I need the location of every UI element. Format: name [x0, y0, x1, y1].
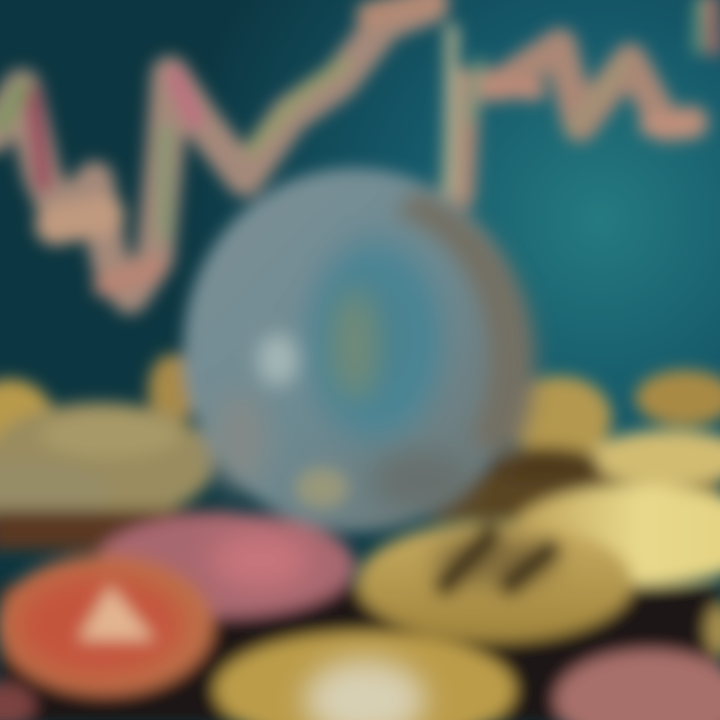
bar: bright yellow coin edge — [510, 485, 720, 585]
pile: back row of gold coins — [0, 354, 720, 550]
coin: bottom gold — [215, 632, 515, 720]
chart: blurred market line — [0, 0, 714, 295]
coin: bottom right rose — [555, 650, 720, 720]
coin: orange red — [0, 555, 213, 695]
icon: pale triangle on red coin — [78, 585, 155, 640]
dark gaps between coins — [0, 585, 720, 720]
coin: gold with dark symbol — [357, 522, 633, 642]
coin: lower left rose — [0, 683, 35, 720]
pile: front row of coins — [0, 485, 720, 720]
coin: right edge gold — [706, 604, 720, 656]
coin: pink — [95, 513, 355, 617]
icon: large silver coin — [183, 168, 536, 532]
